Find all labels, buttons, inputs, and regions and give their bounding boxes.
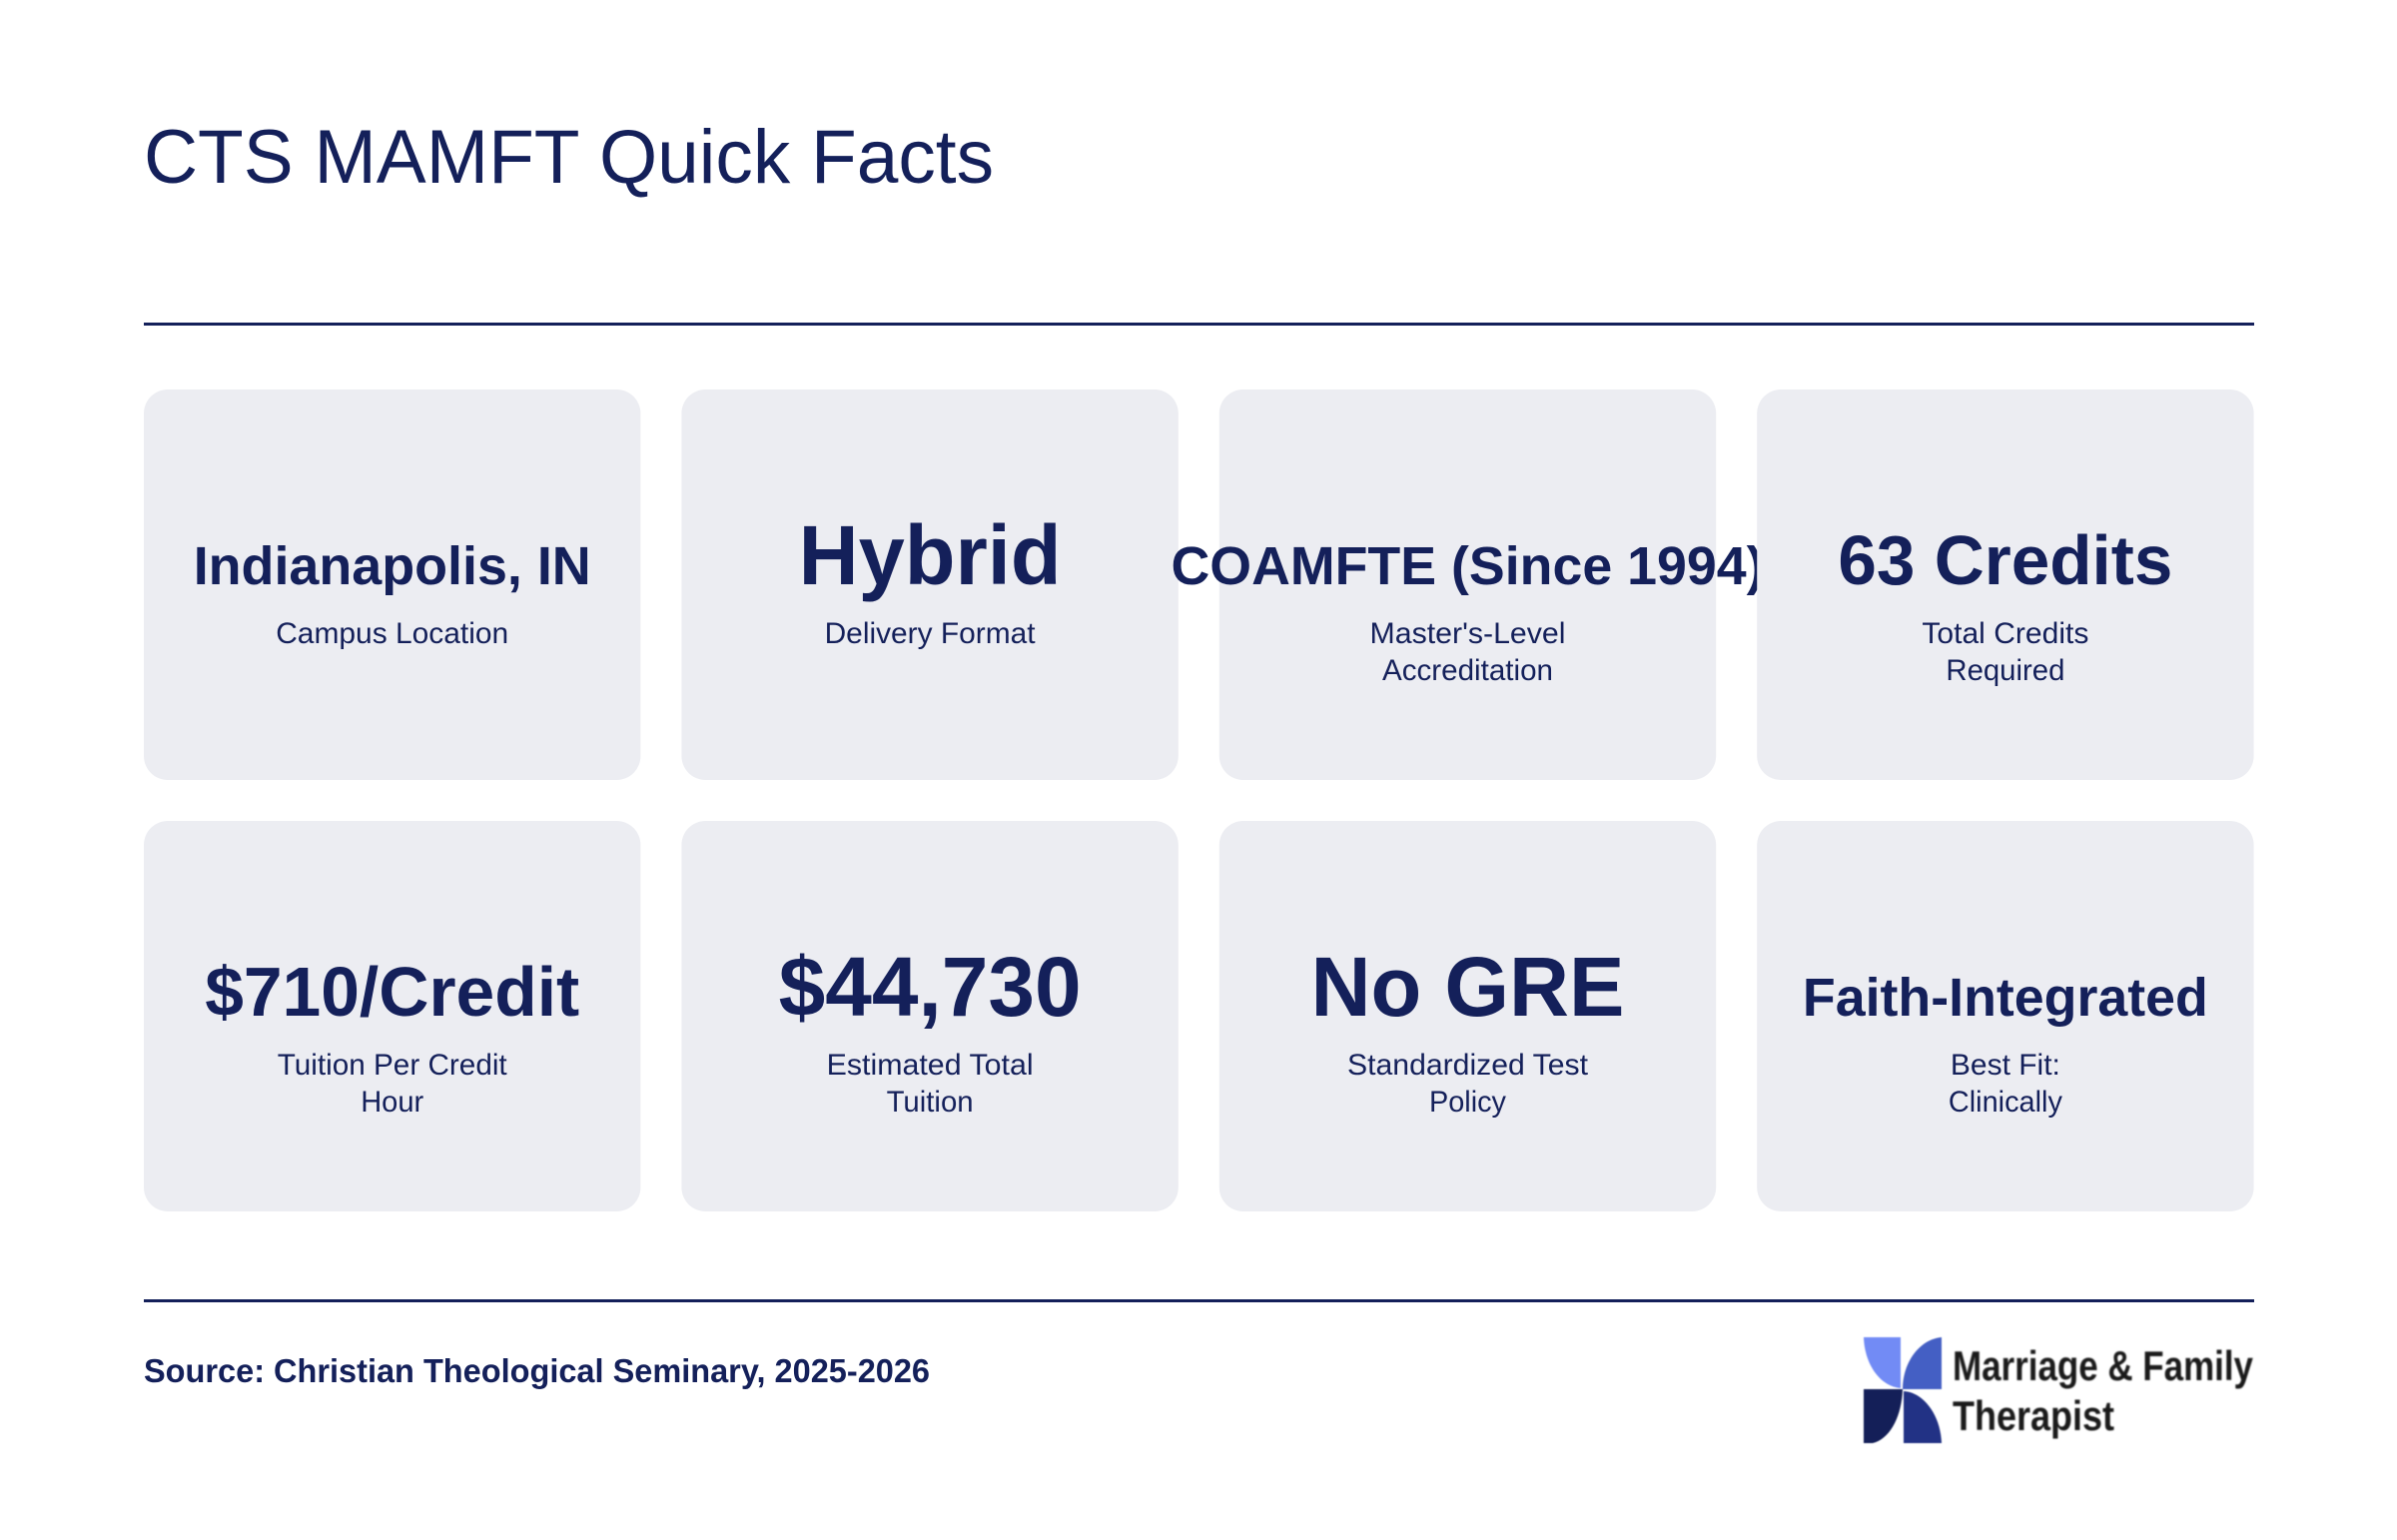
panel: best fit: Faith-Integrated bbox=[1803, 968, 2208, 1028]
panel: delivery format bbox=[681, 389, 1179, 780]
panel: best fit bbox=[1757, 821, 2254, 1211]
panel: estimated total tuition: Estimated Total bbox=[827, 1049, 1034, 1082]
panel: campus location bbox=[144, 389, 640, 780]
panel: total credits bbox=[1757, 389, 2254, 780]
panel: tuition per credit: Hour bbox=[361, 1086, 423, 1119]
panel: estimated total tuition: Tuition bbox=[887, 1086, 974, 1119]
source note: Source: Christian Theological Seminary, 2025-2026 bbox=[144, 1352, 930, 1389]
panel: best fit: Clinically bbox=[1949, 1086, 2062, 1119]
panel: delivery format: Hybrid bbox=[799, 508, 1062, 602]
panel: campus location: Indianapolis, IN bbox=[194, 536, 591, 596]
logo wordmark: Therapist bbox=[1953, 1392, 2114, 1439]
panel: accreditation: Master's-Level bbox=[1370, 617, 1566, 650]
panel: standardized test policy bbox=[1219, 821, 1716, 1211]
panel: accreditation bbox=[1171, 389, 1764, 780]
title: CTS MAMFT Quick Facts bbox=[144, 115, 994, 200]
logo wordmark: Marriage & Family bbox=[1953, 1342, 2254, 1389]
panel: estimated total tuition bbox=[681, 821, 1179, 1211]
panel: standardized test policy: Policy bbox=[1429, 1086, 1506, 1119]
panel: best fit: Best Fit: bbox=[1951, 1049, 2060, 1082]
panel: delivery format: Delivery Format bbox=[825, 617, 1036, 650]
panel: tuition per credit: $710/Credit bbox=[205, 953, 579, 1031]
panel: accreditation: Accreditation bbox=[1382, 654, 1553, 687]
logo bbox=[1864, 1337, 2254, 1443]
panel: total credits: Total Credits bbox=[1922, 617, 2088, 650]
panel: total credits: Required bbox=[1946, 654, 2064, 687]
panel: accreditation: COAMFTE (Since 1994) bbox=[1171, 536, 1764, 596]
icon: pinwheel bbox=[1864, 1337, 1942, 1443]
logo wordmark bbox=[1953, 1342, 2254, 1439]
panel: tuition per credit: Tuition Per Credit bbox=[278, 1049, 507, 1082]
panel: standardized test policy: Standardized Test bbox=[1347, 1049, 1589, 1082]
panel: tuition per credit bbox=[144, 821, 640, 1211]
panel: standardized test policy: No GRE bbox=[1310, 940, 1624, 1034]
panel: campus location: Campus Location bbox=[276, 617, 508, 650]
panel: total credits: 63 Credits bbox=[1838, 521, 2172, 599]
panel: estimated total tuition: $44,730 bbox=[779, 940, 1082, 1034]
